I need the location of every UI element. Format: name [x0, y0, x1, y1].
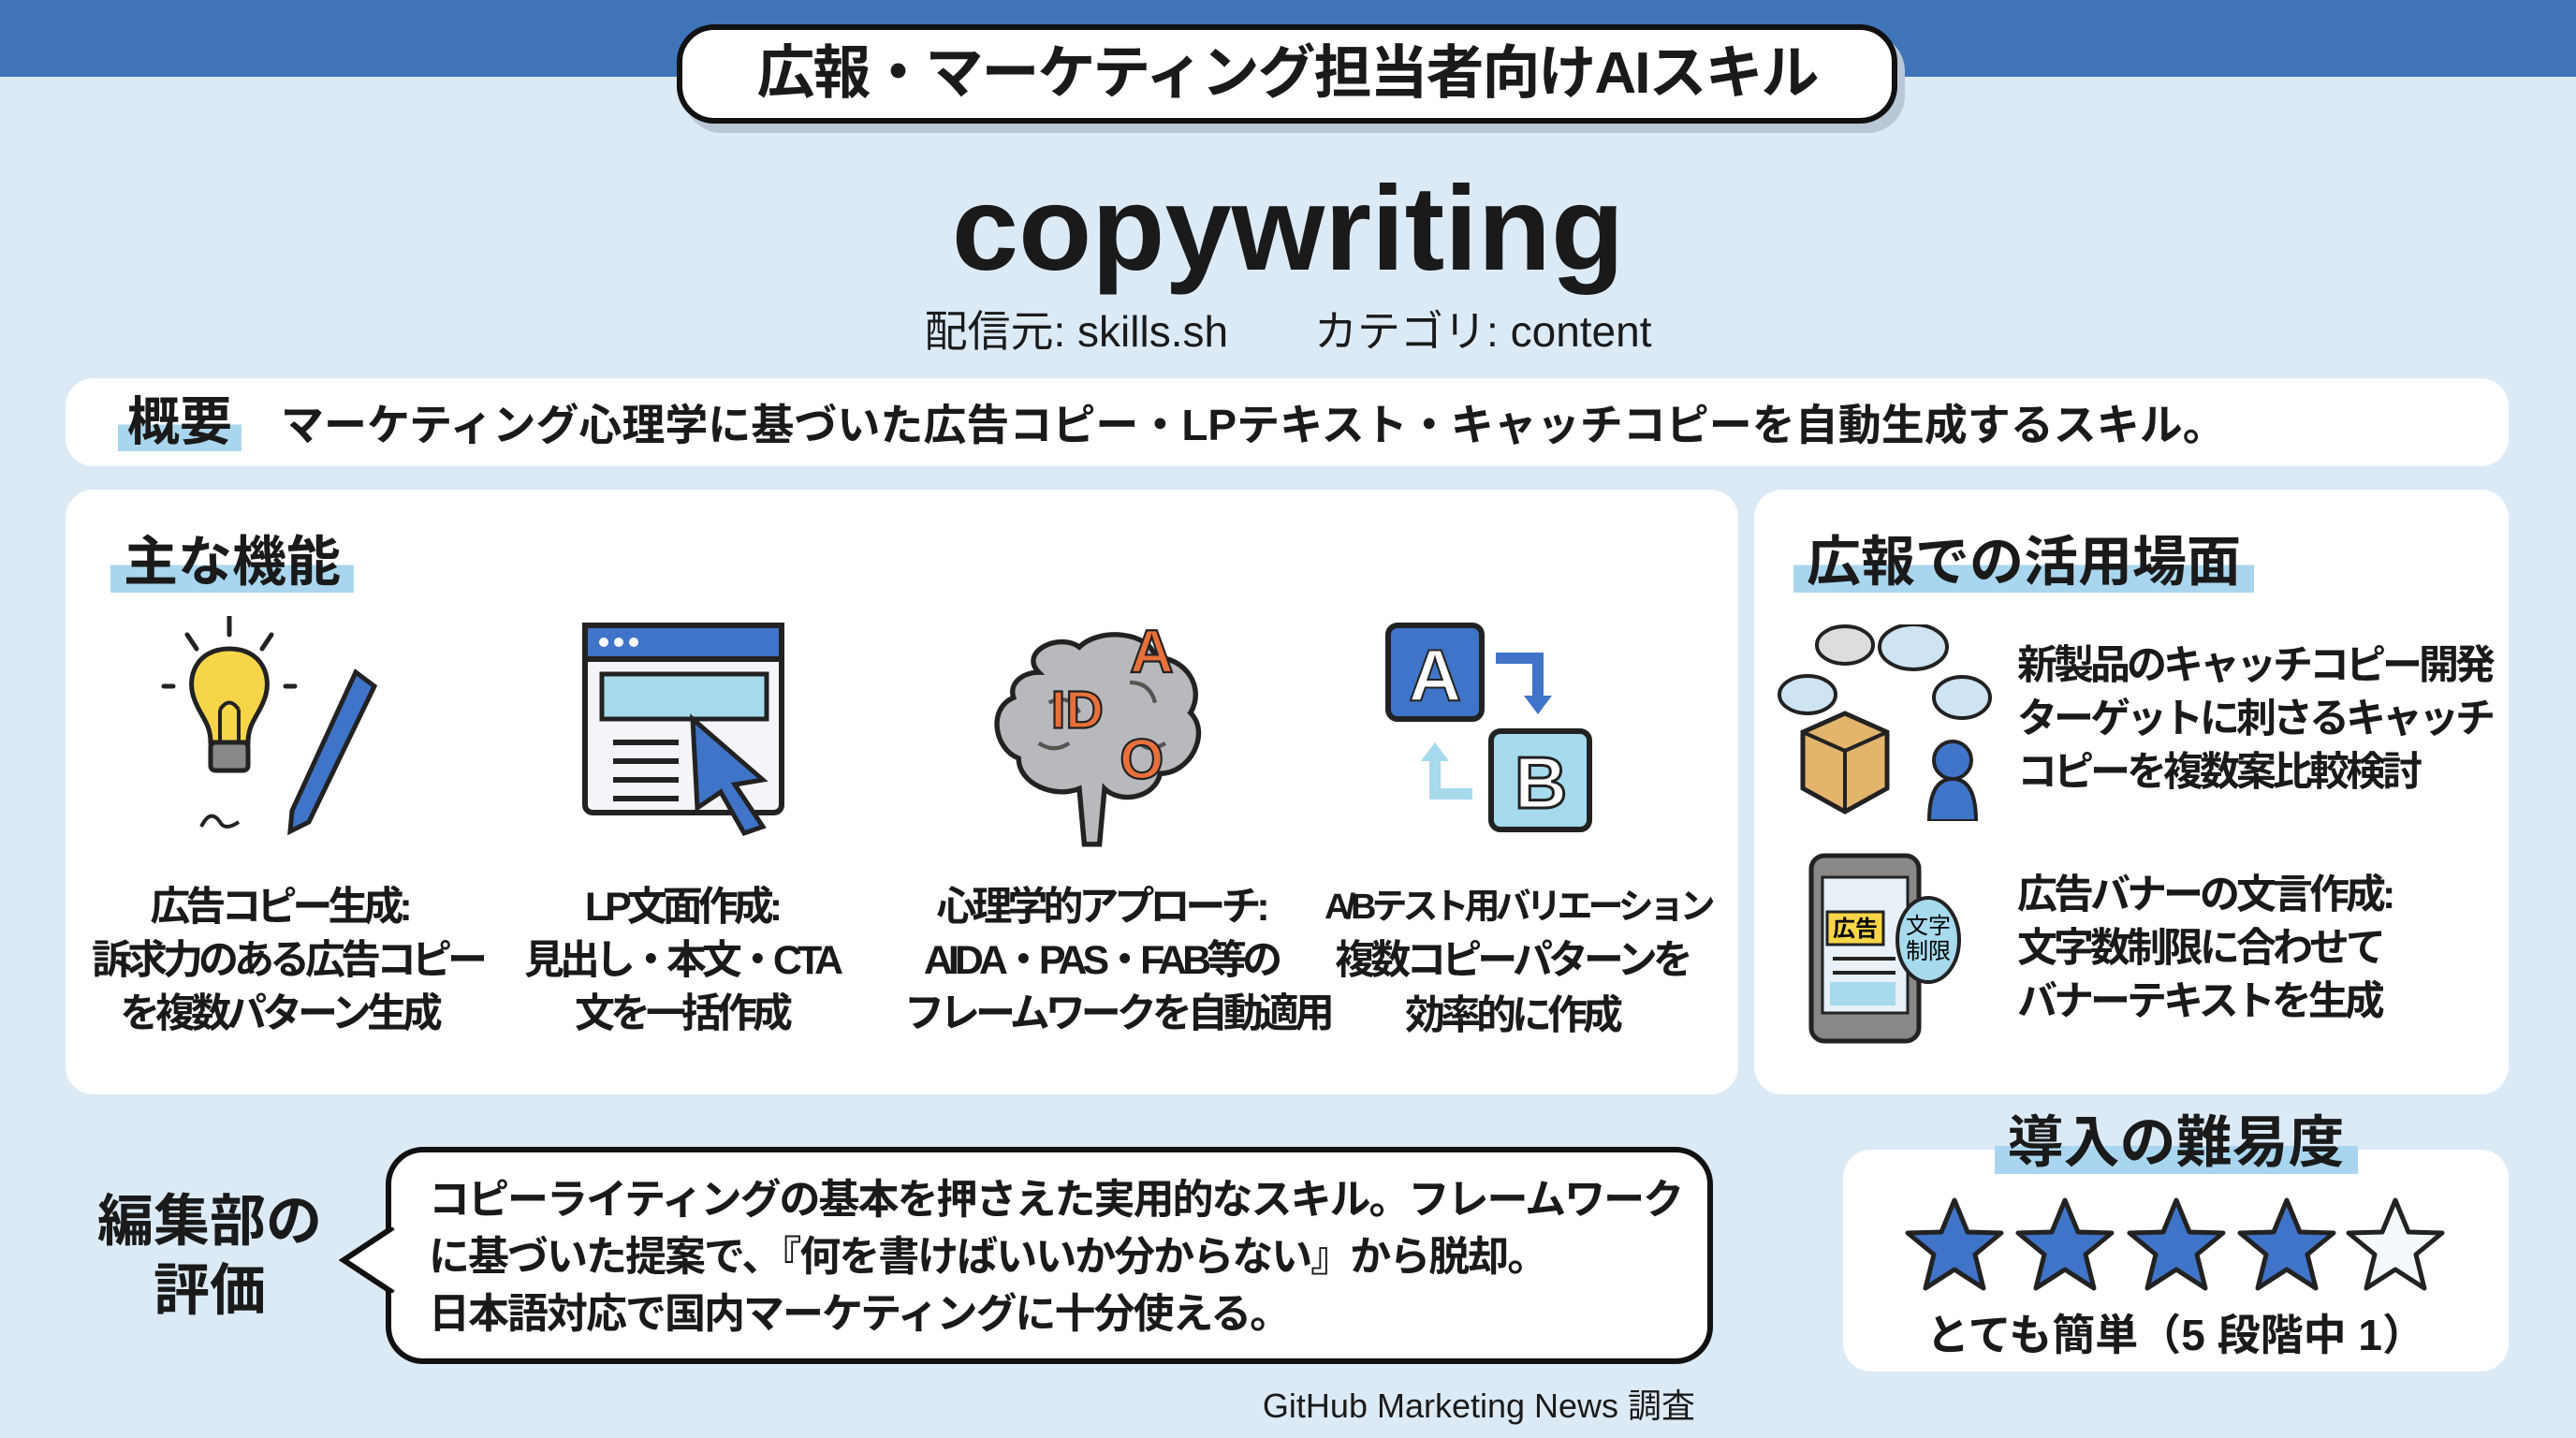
title pill: 広報・マーケティング担当者向けAIスキル [756, 41, 1818, 106]
footer credit: GitHub Marketing News 調査 [1263, 1387, 1695, 1425]
review text: に基づいた提案で、『何を書けばいいか分からない』から脱却。 [429, 1234, 1546, 1280]
caption: A/B: A/Bテスト用バリエーション [1325, 888, 1711, 927]
text: use case 1: 新製品のキャッチコピー開発 [2017, 643, 2492, 688]
caption: ad copy: 広告コピー生成: [150, 885, 408, 930]
caption: A/B: 効率的に作成 [1405, 993, 1618, 1038]
caption: ad copy [92, 885, 484, 1036]
difficulty text: とても簡単（5 段階中 1） [1926, 1311, 2425, 1359]
icon: A/B test: B [1515, 741, 1567, 824]
icon: phone with ad [1808, 854, 1961, 1043]
caption: A/B: 複数コピーパターンを [1335, 938, 1689, 983]
text: use case 2 [2017, 873, 2393, 1024]
icon: bulb and pen [161, 616, 378, 835]
icon: phone with ad: 制限 [1906, 932, 1951, 965]
bubble tail [339, 1227, 395, 1293]
caption: psychology: フレームワークを自動適用 [904, 991, 1330, 1036]
caption: psychology: AIDA・PAS・FAB等の [924, 938, 1278, 983]
review text: 日本語対応で国内マーケティングに十分使える。 [429, 1291, 1289, 1337]
icon: brain with AIDO: ID [1051, 681, 1104, 740]
text: use case 2: バナーテキストを生成 [2017, 979, 2381, 1024]
icon: LP page with cursor [582, 623, 784, 836]
caption: LP: 見出し・本文・CTA [524, 938, 839, 983]
icon: phone with ad: 文字 [1906, 907, 1951, 940]
caption: ad copy: 訴求力のある広告コピー [92, 938, 483, 983]
text: use case 1: ターゲットに刺さるキャッチ [2017, 697, 2492, 741]
heading: features: 主な機能 [124, 532, 341, 593]
top band [0, 0, 2576, 77]
overview bar [66, 378, 2509, 466]
overview text: マーケティング心理学に基づいた広告コピー・LPテキスト・キャッチコピーを自動生成するスキル。 [281, 401, 2226, 449]
icon: A/B test: A [1409, 634, 1461, 716]
caption: LP: LP文面作成: [585, 885, 778, 930]
caption: LP: 文を一括作成 [575, 991, 788, 1036]
icon: brain with AIDO: A [1130, 617, 1174, 685]
panel: PR use cases [1754, 490, 2509, 1094]
text: use case 1: コピーを複数案比較検討 [2017, 750, 2419, 795]
text: use case 1 [2017, 643, 2496, 795]
review text: コピーライティングの基本を押さえた実用的なスキル。フレームワーク [429, 1177, 1682, 1223]
label: editorial review: 評価 [154, 1259, 266, 1322]
icon: brain with AIDO [994, 617, 1202, 846]
overview label: 概要 [127, 392, 232, 451]
speech bubble [386, 1147, 1713, 1364]
caption: psychology: 心理学的アプローチ: [936, 885, 1266, 930]
label: editorial review: 編集部の [97, 1190, 322, 1253]
icon: box, person, bubbles [1778, 624, 1992, 821]
title pill [677, 24, 1897, 124]
icon: brain with AIDO: O [1120, 727, 1164, 791]
review text [429, 1177, 1682, 1337]
caption: psychology [904, 885, 1331, 1036]
icon: phone with ad: 広告 [1833, 910, 1878, 943]
stars [1906, 1198, 2445, 1290]
main title: copywriting [952, 162, 1624, 296]
caption: ad copy: を複数パターン生成 [120, 991, 438, 1036]
label: editorial review [97, 1190, 322, 1322]
caption: LP [524, 885, 842, 1036]
panel: difficulty [1843, 1150, 2509, 1372]
heading: use cases: 広報での活用場面 [1807, 532, 2241, 593]
difficulty heading: 導入の難易度 [2007, 1111, 2344, 1174]
icon: A/B test [1385, 623, 1592, 832]
text: use case 2: 広告バナーの文言作成: [2017, 873, 2392, 917]
caption: A/B [1325, 888, 1713, 1038]
subtitle: 配信元: skills.sh カテゴリ: content [924, 307, 1652, 356]
panel: main features [66, 490, 1738, 1094]
text: use case 2: 文字数制限に合わせて [2017, 926, 2382, 971]
